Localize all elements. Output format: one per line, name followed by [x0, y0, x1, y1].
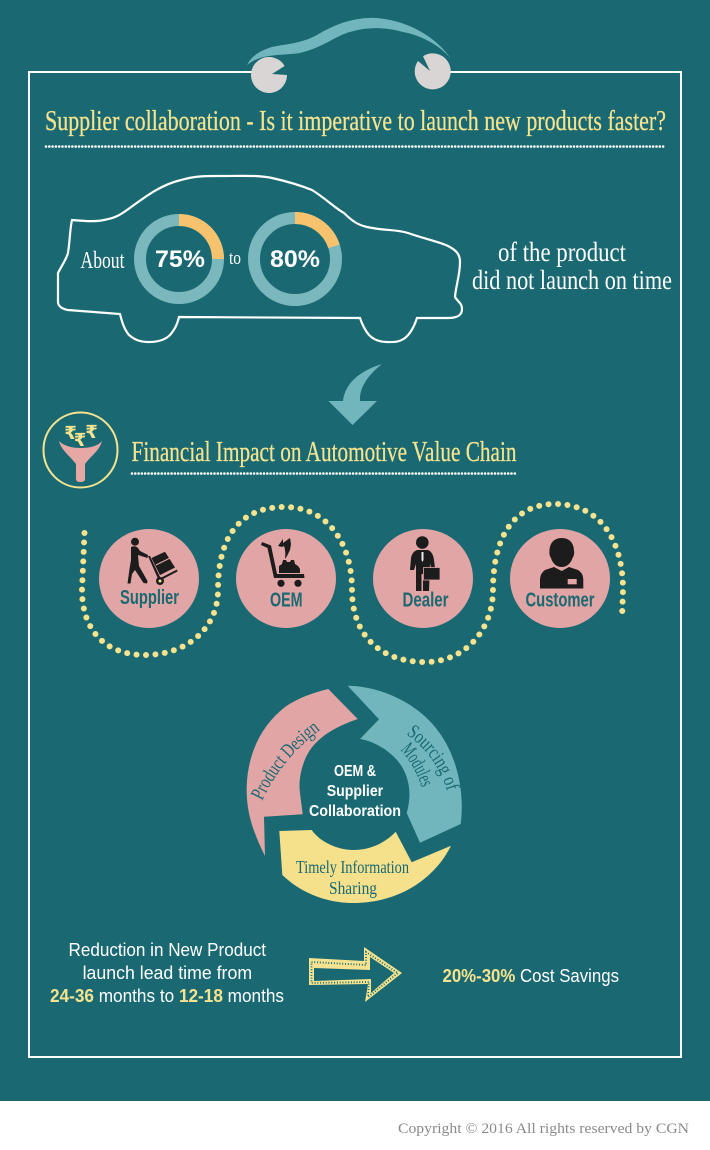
cycle segment: timely information sharing: Sharing: [329, 878, 377, 898]
icon: car outline: [58, 176, 462, 342]
cycle segment: sourcing of modules: Modules: [400, 742, 430, 787]
value chain node: OEM: OEM: [270, 590, 302, 612]
cycle diagram: OEM and supplier collaboration: [246, 686, 462, 903]
value chain node: customer: [510, 529, 610, 628]
value chain node: dealer: Dealer: [402, 590, 449, 612]
text: About: About: [80, 248, 125, 274]
arrow: sketched right: [309, 947, 402, 1002]
donut: 80%: 80%: [270, 246, 320, 273]
cycle segment: sourcing of modules: Sourcing of: [407, 725, 460, 791]
icon: businessman with briefcase: [410, 536, 435, 591]
text: did not launch on time: of the product: [498, 237, 626, 267]
text: lead time reduction: Reduction in New Product: [68, 940, 266, 960]
icon: customer service man: [540, 538, 583, 588]
cycle segment: product design: [246, 689, 358, 856]
donut: 75%: [140, 220, 218, 298]
copyright: Copyright © 2016 All rights reserved by CGN: [398, 1121, 689, 1137]
value chain node: dealer: [373, 529, 473, 628]
icon: rupee funnel: ₹: [74, 430, 86, 451]
car outline with donut statistics: [58, 176, 462, 342]
cycle segment: timely information sharing: [279, 830, 451, 903]
outer frame: [29, 72, 681, 1057]
icon: rupee funnel: ₹: [64, 423, 77, 444]
text: lead time reduction: 24-36 months to 12-18 months: [50, 986, 284, 1006]
cycle segment: sourcing of modules: [348, 686, 462, 843]
icon: worker with hand truck: [128, 538, 178, 585]
arrow: curved down: [328, 364, 382, 425]
cycle centre label: Collaboration: [309, 803, 401, 820]
icon: car roof swoosh with wheels: [247, 18, 451, 93]
icon: rupee funnel: ₹: [85, 422, 98, 443]
value chain node: supplier: Supplier: [120, 587, 179, 609]
text: did not launch on time: did not launch on time: [472, 265, 672, 295]
text: to: to: [229, 248, 241, 269]
value chain node: OEM: [236, 529, 336, 628]
value chain node: customer: Customer: [526, 590, 595, 612]
icon: rupee funnel: [44, 412, 118, 488]
value chain node: supplier: [99, 529, 199, 628]
icon: cart with gear and car: [261, 538, 304, 587]
cycle centre label: OEM &: [334, 763, 376, 780]
cycle segment: timely information sharing: Timely Information: [296, 857, 409, 877]
text: lead time reduction: [50, 940, 284, 1006]
dotted wave path: [82, 504, 623, 662]
donut: 75%: 75%: [155, 246, 205, 273]
text: did not launch on time: [472, 237, 672, 295]
donut: 80%: [254, 218, 336, 300]
cycle segment: product design: Product Design: [250, 724, 320, 800]
text: lead time reduction: launch lead time from: [83, 963, 252, 983]
cycle centre label: Supplier: [327, 783, 383, 800]
heading: financial impact: Financial Impact on Automotive Value Chain: [132, 437, 516, 468]
cycle centre label: [309, 763, 401, 820]
text: cost savings: 20%-30% Cost Savings: [442, 966, 619, 986]
